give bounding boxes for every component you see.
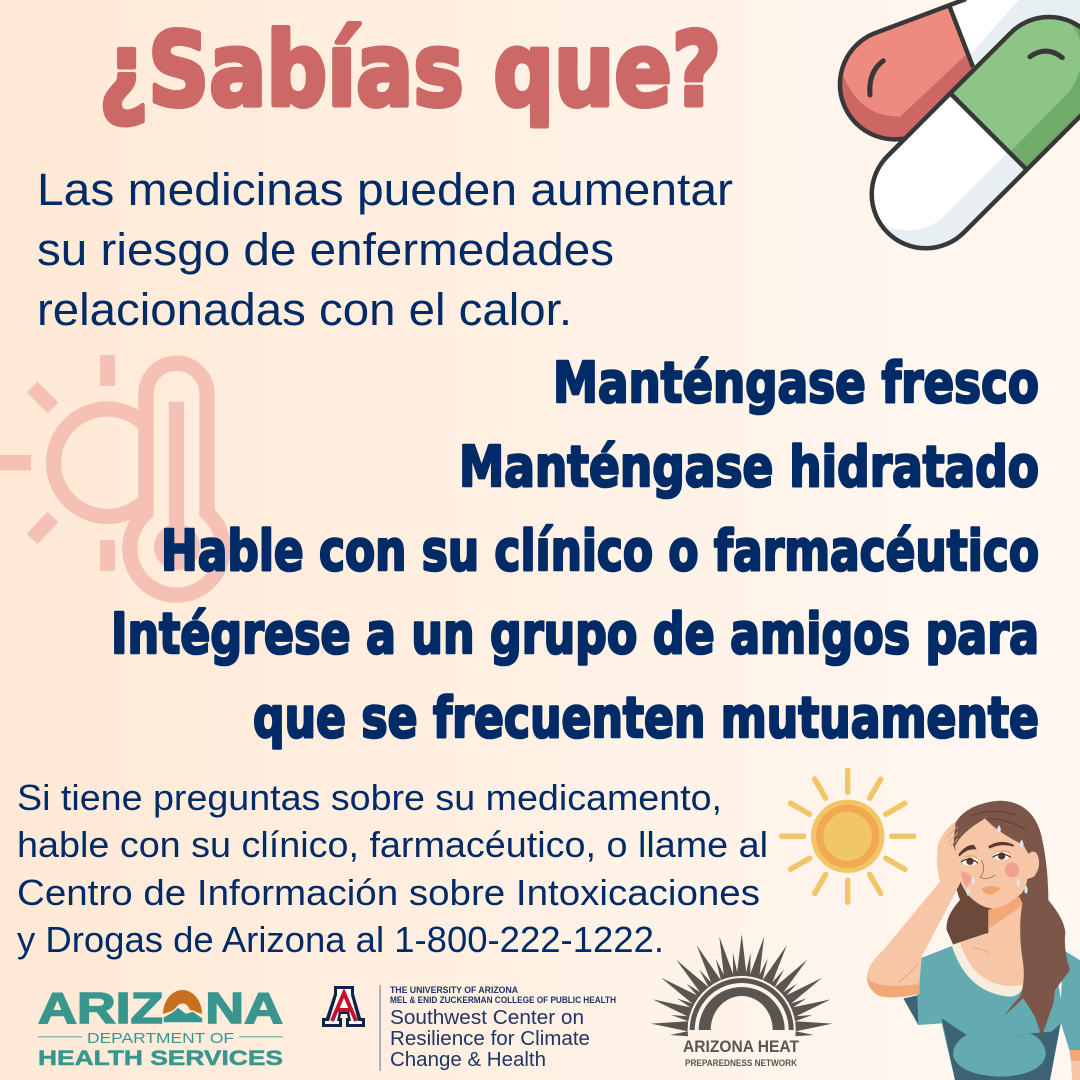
logo: University of Arizona block A — [322, 986, 365, 1027]
logo: Southwest Center on Resilience: THE UNIVERSITY OF ARIZONA — [390, 985, 518, 996]
logo: Southwest Center on Resilience: Change & Health — [390, 1049, 546, 1071]
icon: sun — [782, 770, 914, 902]
contact text block: hable con su clínico, farmacéutico, o llame al — [17, 824, 768, 865]
icon: medicine capsules — [840, 0, 1080, 260]
icon: sun and thermometer watermark — [0, 355, 223, 595]
title: ¿Sabías que? — [99, 11, 721, 130]
intro text block — [37, 164, 733, 335]
contact text block: Centro de Información sobre Intoxicaciones — [17, 872, 760, 913]
intro text block: su riesgo de enfermedades — [37, 224, 614, 275]
logo: Southwest Center on Resilience — [380, 985, 616, 1071]
logo: Arizona Heat Preparedness Network: PREPAREDNESS NETWORK — [685, 1058, 797, 1069]
logo: Arizona Heat Preparedness Network: ARIZONA HEAT — [683, 1038, 799, 1056]
logo: Arizona Department of Health Services: HEALTH SERVICES — [38, 1047, 283, 1070]
logo: Arizona Heat Preparedness Network — [651, 934, 833, 1069]
contact text block — [17, 777, 768, 960]
contact text block: Si tiene preguntas sobre su medicamento, — [17, 777, 722, 818]
logo: Arizona Department of Health Services: DEPARTMENT OF — [87, 1030, 234, 1047]
logo: Southwest Center on Resilience: MEL & ENID ZUCKERMAN COLLEGE OF PUBLIC HEALTH — [390, 995, 616, 1006]
contact text block: y Drogas de Arizona al 1-800-222-1222. — [17, 919, 664, 960]
logo: Arizona Department of Health Services: ARIZ ONA — [38, 984, 283, 1033]
logo: Arizona Department of Health Services — [38, 984, 283, 1070]
logo: Southwest Center on Resilience: Southwest Center on — [390, 1007, 584, 1029]
intro text block: Las medicinas pueden aumentar — [37, 164, 733, 215]
illustration: overheated woman — [867, 801, 1080, 1080]
intro text block: relacionadas con el calor. — [37, 284, 572, 335]
logo: Southwest Center on Resilience: Resilience for Climate — [390, 1028, 590, 1050]
tips list — [111, 351, 1039, 751]
